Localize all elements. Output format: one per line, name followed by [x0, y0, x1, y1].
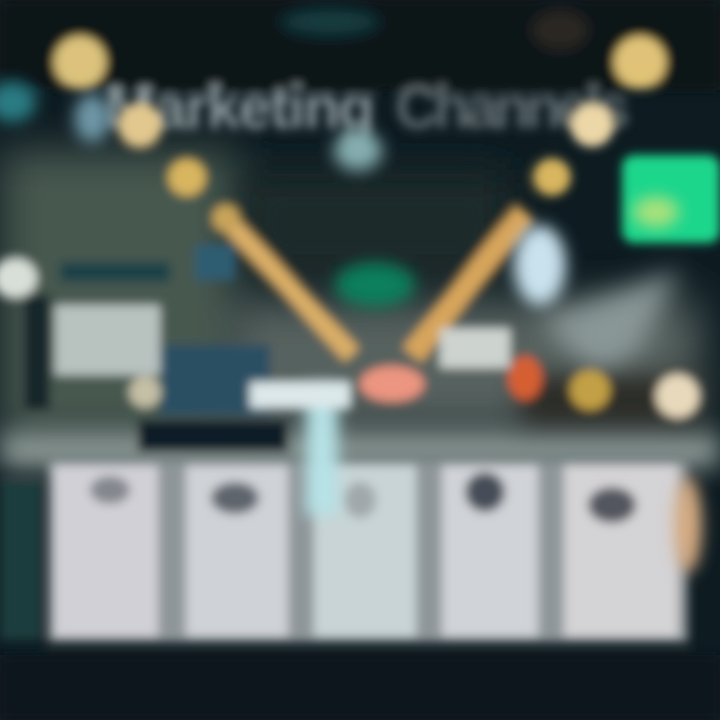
icon 5	[588, 487, 636, 523]
gold dot	[570, 370, 610, 410]
right nodes	[614, 36, 666, 88]
title: Marketing	[105, 74, 375, 141]
card 3	[314, 465, 416, 637]
grey arrow shape	[540, 270, 680, 380]
right dark block	[520, 375, 700, 425]
panel: cards backing	[48, 462, 688, 642]
orange dot	[508, 356, 542, 400]
icon 3	[344, 482, 376, 518]
right light block	[440, 328, 510, 368]
green callout	[622, 155, 720, 243]
icon 2	[211, 482, 259, 514]
card 4	[442, 465, 538, 637]
left title accents	[0, 8, 590, 142]
panel: five cards	[54, 465, 678, 637]
left orange line	[225, 218, 352, 355]
title	[105, 74, 630, 141]
card 1	[54, 465, 158, 637]
card accent	[674, 477, 702, 573]
right orange line	[412, 212, 525, 355]
card 2	[186, 465, 288, 637]
green callout highlight	[634, 198, 678, 226]
gold nodes	[54, 36, 666, 232]
dark blue device	[138, 345, 288, 452]
center green shape	[335, 263, 415, 307]
pale blue shape	[514, 225, 566, 305]
icon 4	[465, 472, 505, 512]
icon 1	[90, 476, 130, 504]
title accent	[334, 130, 382, 170]
left white shapes	[0, 245, 235, 410]
salmon center node	[360, 366, 424, 402]
light bar	[250, 382, 350, 408]
left nodes	[54, 36, 106, 88]
card icons	[90, 472, 636, 523]
funnel lines	[225, 212, 525, 355]
card 5	[564, 465, 678, 637]
white dot	[656, 374, 700, 418]
left small dot	[129, 376, 161, 408]
title: Channels	[395, 74, 630, 141]
light blue column	[306, 385, 338, 515]
